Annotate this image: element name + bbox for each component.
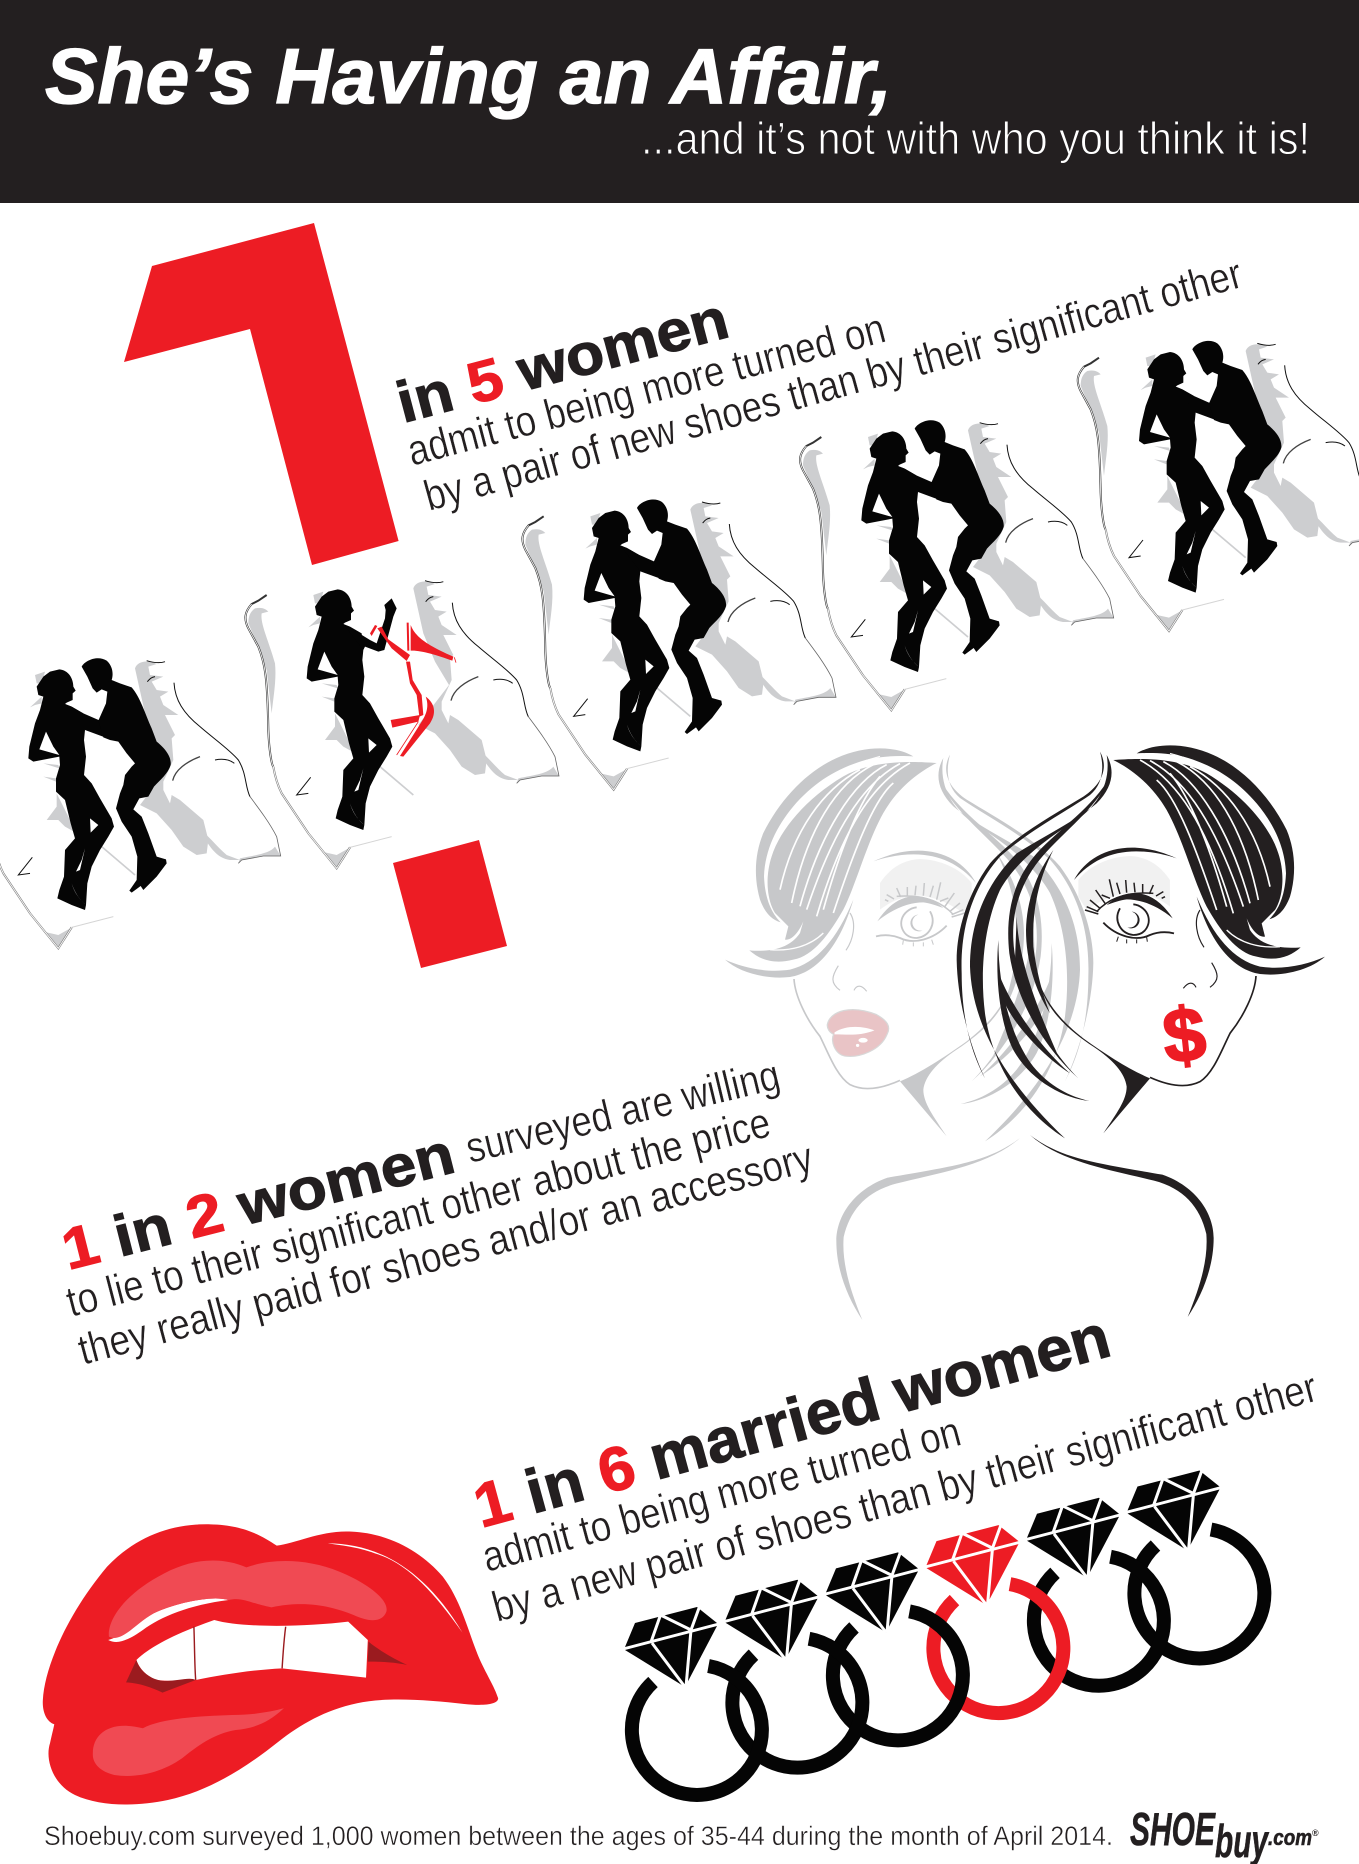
stat 1: 1 in 5 women (390, 250, 1247, 521)
title: She’s Having an Affair, (45, 32, 892, 120)
couple 1 (0, 658, 281, 948)
stat 3 heading: 1 in 6 married women (466, 1302, 1117, 1542)
stat 1 line 2: by a pair of new shoes than by their significant other (419, 250, 1247, 521)
couple 5 (1078, 341, 1359, 631)
ring 1 (625, 1607, 762, 1795)
couple 4 (800, 420, 1114, 710)
ring 5 (1027, 1498, 1164, 1686)
Shoebuy logo (1130, 1803, 1319, 1864)
ring 2 (726, 1580, 862, 1768)
stat 1 line 1: admit to being more turned on (402, 304, 890, 476)
Shoebuy logo: .com (1268, 1825, 1312, 1850)
stat 3 line 1: admit to being more turned on (477, 1408, 966, 1582)
Shoebuy logo: SHOE (1130, 1803, 1216, 1855)
couple 3 (522, 500, 836, 790)
red square dot (393, 840, 507, 968)
stat 1 heading: in 5 women (390, 286, 735, 436)
footer survey note: Shoebuy.com surveyed 1,000 women between the ages of 35-44 during the month of April 2014. (44, 1821, 1113, 1851)
pink lips (827, 1010, 889, 1056)
gray mirrored face (725, 748, 1093, 1320)
Shoebuy logo: ® (1312, 1828, 1319, 1838)
diamond rings row (625, 1470, 1264, 1795)
black face (957, 745, 1325, 1317)
stat 2 line 2: to lie to their significant other about the price (61, 1099, 775, 1327)
stat 2 heading: 1 in 2 women (55, 1121, 461, 1283)
couple 2: woman alone (245, 581, 559, 868)
stat 2 line 1: surveyed are willing (461, 1051, 784, 1173)
stat 3: 1 in 6 married women (466, 1302, 1322, 1632)
stat 2 line 3: they really paid for shoes and/or an accessory (73, 1133, 818, 1375)
icon: red high heel shoe (370, 623, 456, 757)
big red number one (124, 223, 399, 565)
stat 2: 1 in 2 women (55, 1051, 818, 1375)
teeth (136, 1620, 368, 1681)
red biting lips (43, 1524, 498, 1804)
ring 6 (1128, 1470, 1264, 1658)
ring 4: red (926, 1525, 1063, 1713)
dollar sign mouth: $ (1159, 991, 1210, 1080)
ring 3 (826, 1552, 963, 1740)
header band (0, 0, 1359, 203)
subtitle: ...and it’s not with who you think it is! (641, 113, 1310, 164)
row of couples in bed (0, 341, 1359, 948)
